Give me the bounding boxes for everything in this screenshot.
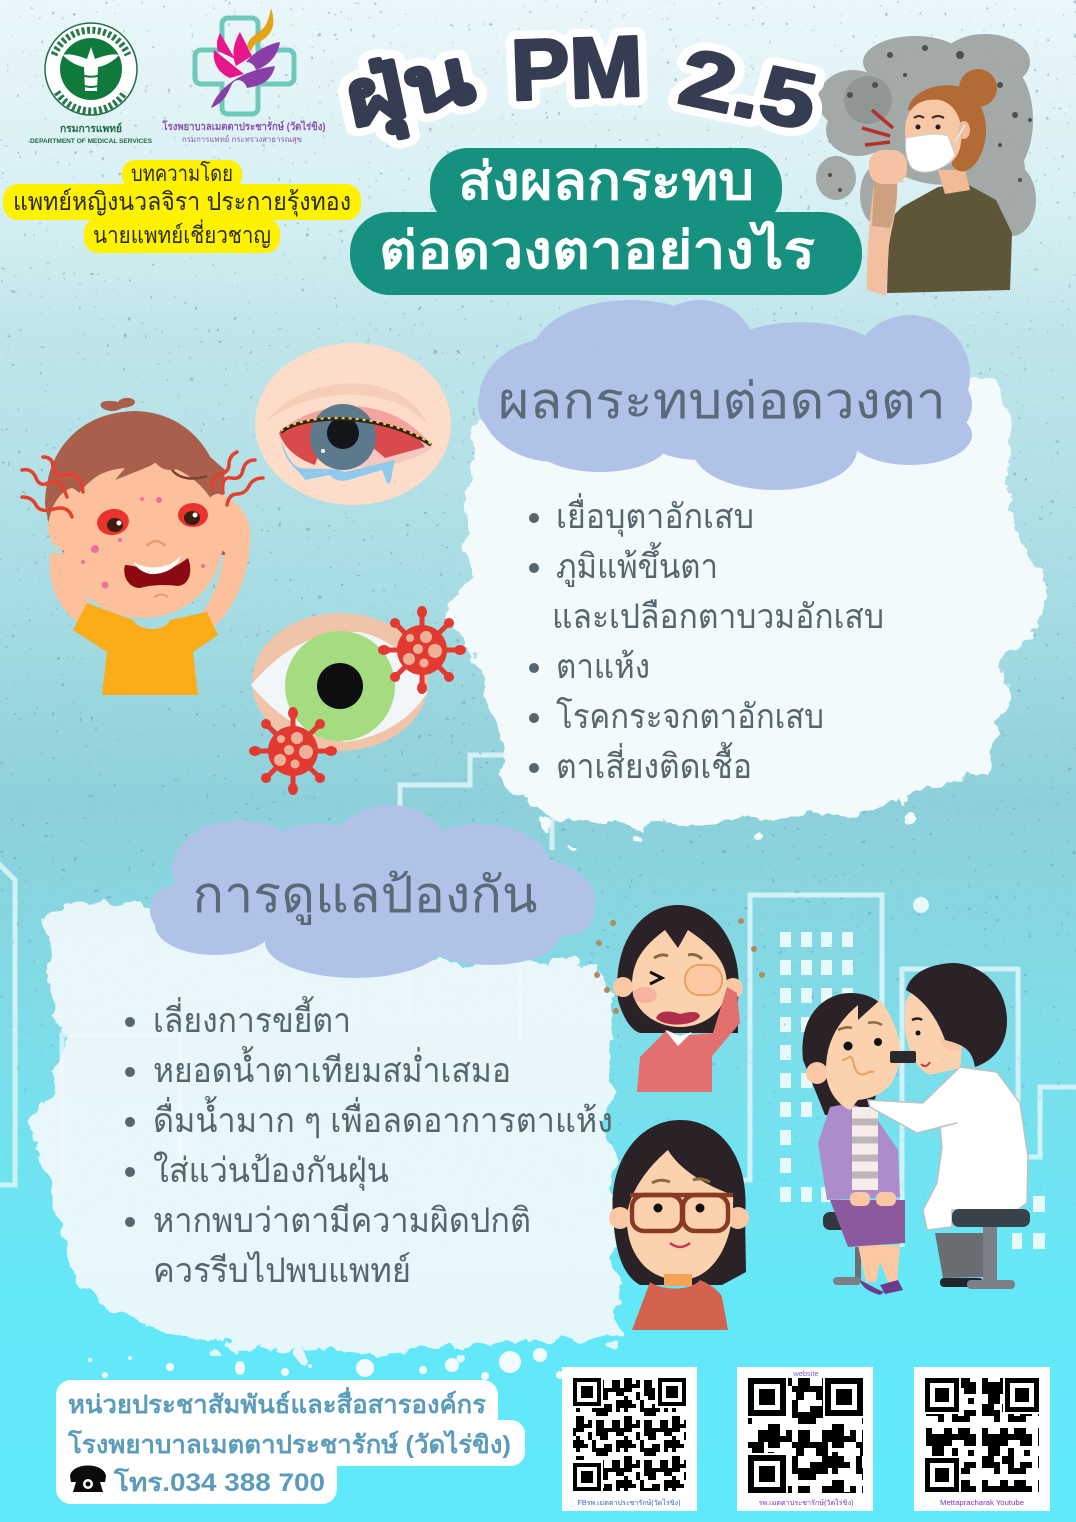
QR code: website bbox=[737, 1367, 873, 1511]
panel: eye effects white splatter bbox=[451, 376, 1045, 849]
QR code: website: รพ.เมตตาประชารักษ์(วัดไร่ขิง) bbox=[758, 1498, 854, 1507]
main title: dust PM 2.5: PM bbox=[509, 18, 645, 119]
icon: virus lower bbox=[249, 707, 337, 795]
icon: virus upper bbox=[378, 606, 466, 694]
contact panel: โทร.034 388 700 bbox=[113, 1467, 325, 1497]
list: eye effects: เยื่อบุตาอักเสบ bbox=[556, 493, 754, 537]
illustration: green eye with viruses bbox=[249, 606, 466, 795]
list: prevention: หยอดน้ำตาเทียมสม่ำเสมอ bbox=[153, 1046, 511, 1090]
main title: dust PM 2.5: 2.5 bbox=[672, 32, 824, 147]
author credit yellow labels: บทความโดย bbox=[131, 161, 233, 186]
list: eye effects: ภูมิแพ้ขึ้นตา bbox=[556, 542, 718, 587]
heading: prevention: การดูแลป้องกัน bbox=[192, 867, 538, 925]
illustration: boy with irritated eyes bbox=[22, 398, 263, 695]
contact panel: หน่วยประชาสัมพันธ์และสื่อสารองค์กร bbox=[68, 1387, 487, 1419]
list: eye effects: ตาแห้ง bbox=[556, 648, 650, 686]
list: eye effects: และเปลือกตาบวมอักเสบ bbox=[552, 598, 884, 636]
logo: Ministry of Public Health bbox=[30, 23, 153, 145]
background city skyline bbox=[0, 755, 1076, 1249]
contact panel: โรงพยาบาลเมตตาประชารักษ์ (วัดไร่ขิง) bbox=[67, 1429, 511, 1459]
main title: dust PM 2.5: ฝุ่น bbox=[337, 31, 482, 149]
illustration: coughing woman in smoke bbox=[816, 34, 1036, 296]
heading: prevention bbox=[150, 805, 595, 978]
list: prevention: ใส่แว่นป้องกันฝุ่น bbox=[153, 1151, 389, 1191]
panel: prevention white splatter bbox=[30, 902, 620, 1363]
QR code: Facebook bbox=[562, 1367, 697, 1511]
author credit yellow labels: แพทย์หญิงนวลจิรา ประกายรุ้งทอง bbox=[13, 188, 351, 217]
QR code: YouTube: Mettapracharak Youtube bbox=[940, 1500, 1024, 1507]
list: prevention: หากพบว่าตามีความผิดปกติ bbox=[153, 1202, 531, 1240]
list: prevention: ดื่มน้ำมาก ๆ เพื่อลดอาการตาแห้ง bbox=[153, 1096, 613, 1140]
list: prevention: เลี่ยงการขยี้ตา bbox=[153, 996, 351, 1040]
list: eye effects: ตาเสี่ยงติดเชื้อ bbox=[556, 742, 752, 786]
logo: Mettapracharak Hospital bbox=[162, 8, 326, 144]
contact panel bbox=[56, 1380, 525, 1504]
illustration: doctor examining patient bbox=[802, 963, 1030, 1295]
logo: Mettapracharak Hospital: กรมการแพทย์ กระทรวงสาธารณสุข bbox=[182, 134, 302, 144]
icon: telephone bbox=[70, 1466, 106, 1492]
heading: eye effects bbox=[478, 300, 972, 490]
subtitle pills bbox=[350, 148, 862, 295]
logo: Ministry of Public Health: DEPARTMENT OF MEDICAL SERVICES bbox=[30, 138, 153, 145]
illustration: girl with glasses bbox=[609, 1120, 749, 1330]
main title: dust PM 2.5: ฝุ่น bbox=[337, 31, 482, 149]
main title: dust PM 2.5: 2.5 bbox=[672, 32, 824, 147]
list: prevention bbox=[125, 996, 613, 1290]
logo: Mettapracharak Hospital: โรงพยาบาลเมตตาประชารักษ์ (วัดไร่ขิง) bbox=[162, 120, 326, 133]
illustration: girl rubbing eye bbox=[594, 905, 765, 1092]
QR code: Facebook: FBรพ.เมตตาประชารักษ์(วัดไร่ขิง) bbox=[578, 1498, 680, 1507]
logo: Ministry of Public Health: กรมการแพทย์ bbox=[60, 122, 122, 135]
author credit yellow labels: นายแพทย์เชี่ยวชาญ bbox=[93, 219, 271, 248]
list: eye effects: โรคกระจกตาอักเสบ bbox=[556, 697, 824, 736]
main title: dust PM 2.5: PM bbox=[509, 18, 645, 119]
list: eye effects bbox=[529, 493, 884, 786]
illustration: inflamed red eye bbox=[255, 343, 451, 505]
main title: dust PM 2.5 bbox=[337, 18, 824, 149]
QR code: YouTube bbox=[914, 1367, 1050, 1511]
bottom white splatter bbox=[88, 1348, 564, 1380]
subtitle pills: ต่อดวงตาอย่างไร bbox=[379, 220, 815, 280]
subtitle pills: ส่งผลกระทบ bbox=[458, 153, 754, 211]
QR code: website: website bbox=[792, 1369, 819, 1378]
list: prevention: ควรรีบไปพบแพทย์ bbox=[153, 1251, 411, 1290]
author credit yellow labels bbox=[3, 160, 361, 253]
heading: eye effects: ผลกระทบต่อดวงตา bbox=[498, 373, 946, 429]
